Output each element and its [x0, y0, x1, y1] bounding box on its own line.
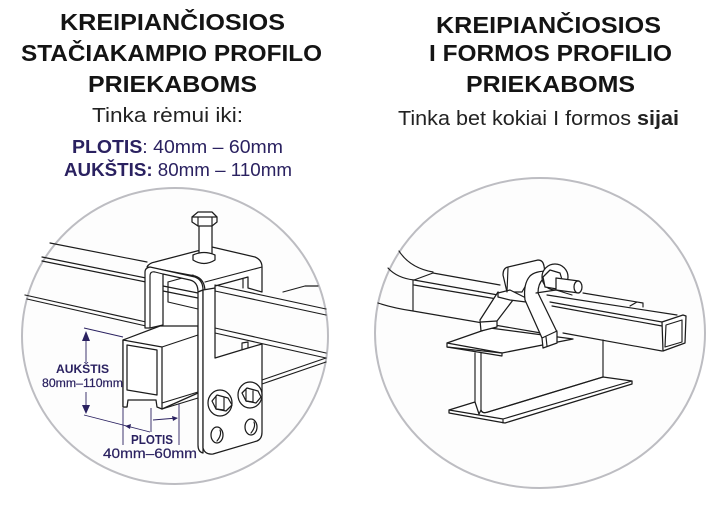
height arrow — [82, 328, 150, 432]
hex bolt — [192, 212, 217, 264]
left heading — [21, 8, 322, 97]
width label: PLOTIS — [131, 432, 173, 447]
left dimensions — [64, 137, 292, 180]
right heading — [429, 11, 672, 97]
right heading: PRIEKABOMS — [466, 71, 635, 97]
left dimensions: PLOTIS : 40mm – 60mm — [72, 137, 283, 157]
clamp left leg and inner tube — [145, 267, 203, 342]
rectangular rail — [378, 251, 686, 351]
rectangular rail — [25, 243, 326, 384]
left dimensions: AUKŠTIS: 80mm – 110mm — [64, 159, 292, 180]
left circle illustration — [22, 188, 328, 484]
right heading: I FORMOS PROFILIO — [429, 40, 672, 66]
left fit text: Tinka rėmui iki: — [92, 105, 243, 127]
right circle illustration — [375, 178, 705, 488]
width label: 40mm–60mm — [103, 445, 197, 461]
height label: 80mm–110mm — [42, 376, 123, 390]
square tube end — [123, 326, 198, 409]
clamp front plate — [198, 288, 262, 454]
left heading: PRIEKABOMS — [88, 71, 257, 97]
side bolts and holes — [208, 382, 262, 443]
rail through window — [215, 285, 326, 358]
height label — [42, 361, 123, 390]
right heading: KREIPIANČIOSIOS — [436, 11, 661, 38]
height label: AUKŠTIS — [56, 361, 109, 376]
clamp top plate — [147, 247, 262, 292]
I-beam — [447, 328, 632, 423]
width label — [103, 432, 197, 461]
width arrow — [123, 404, 179, 445]
left heading: KREIPIANČIOSIOS — [60, 8, 285, 35]
clamp — [480, 260, 582, 348]
right fit text: Tinka bet kokiai I formos sijai — [398, 108, 679, 130]
left heading: STAČIAKAMPIO PROFILO — [21, 39, 322, 66]
